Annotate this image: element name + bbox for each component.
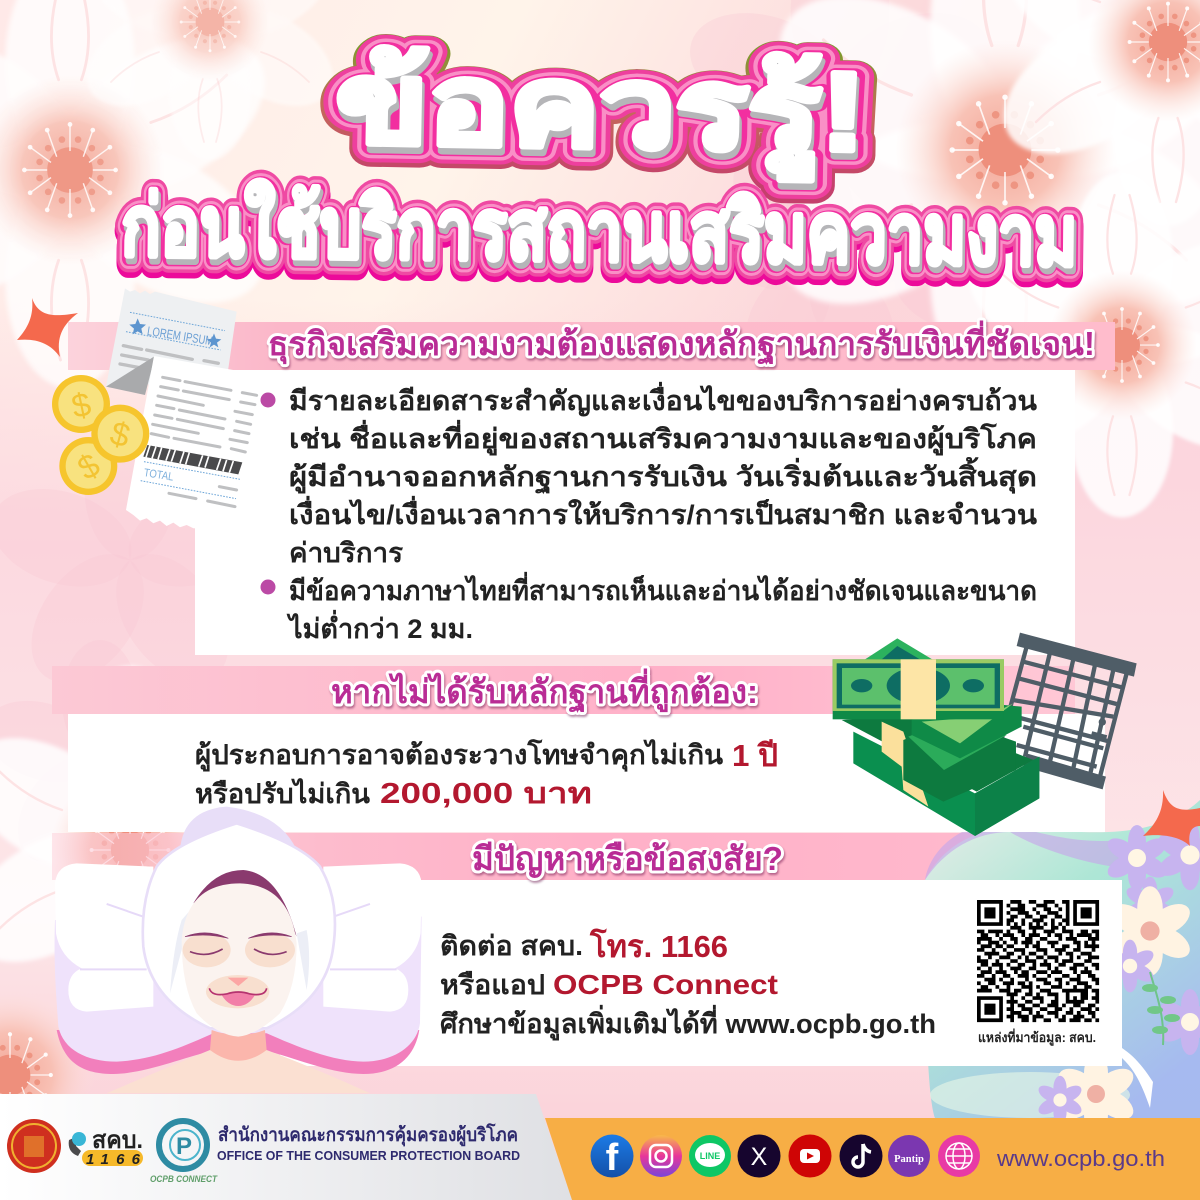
icon: pantip: Pantip [894, 1154, 924, 1165]
bullet one text [289, 381, 1038, 568]
icon: line [689, 1135, 731, 1177]
contact text: โทร. 1166 [589, 928, 728, 964]
icon: star left [17, 298, 78, 357]
icon: facebook [590, 1134, 634, 1179]
penalty text: ผู้ประกอบการอาจต้องระวางโทษจำคุกไม่เกิน [195, 738, 724, 772]
bullet two [260, 580, 276, 594]
hotline 1166 logo: 1166 [86, 1151, 141, 1168]
penalty text: 200,000 บาท [380, 778, 592, 810]
bullet one text: เช่น ชื่อและที่อยู่ของสถานเสริมความงามและของผู้บริโภค [289, 419, 1037, 456]
top bill [833, 638, 1004, 719]
bullet one text: มีรายละเอียดสาระสำคัญและเงื่อนไขของบริการอย่างครบถ้วน [289, 381, 1038, 417]
panel: receipt rules content [260, 320, 1095, 644]
panel: contact [280, 840, 1122, 1066]
band: contact heading [52, 833, 1124, 880]
coins: $ [72, 447, 106, 488]
hotline 1166 logo [69, 1127, 143, 1168]
back receipt [106, 288, 237, 387]
footer: logo panel [0, 1094, 572, 1200]
agency name: OFFICE OF THE CONSUMER PROTECTION BOARD [217, 1148, 520, 1163]
icon: jail bars [998, 633, 1137, 789]
penalty text: 1 ปี [732, 738, 778, 773]
hotline 1166 logo: สคบ. [92, 1127, 143, 1154]
icon: money stacks [833, 638, 1039, 836]
contact text [440, 928, 936, 1041]
QR source caption: แหล่งที่มาข้อมูล: สคบ. [978, 1028, 1096, 1046]
front receipt [106, 356, 290, 530]
bullet one text: ผู้มีอำนาจออกหลักฐานการรับเงิน วันเริ่มต้นและวันสิ้นสุด [289, 456, 1037, 495]
heading: questions: มีปัญหาหรือข้อสงสัย? [472, 840, 783, 878]
agency name [217, 1123, 520, 1163]
bullet two text: ไม่ต่ำกว่า 2 มม. [286, 609, 473, 644]
icon: facebook: f [606, 1137, 619, 1179]
OCPB connect logo: OCPB CONNECT [150, 1174, 218, 1184]
icon: website [938, 1135, 980, 1177]
bullet one text: ค่าบริการ [289, 538, 404, 568]
floral corner at lower right [925, 800, 1200, 1136]
heading band [52, 666, 1075, 714]
panel: receipt rules background [195, 370, 1075, 655]
coins [52, 375, 149, 495]
coins: $ [69, 386, 94, 426]
icon: tiktok [840, 1134, 882, 1178]
title line 1: ข้อควรรู้! [337, 43, 869, 185]
contact text: ศึกษาข้อมูลเพิ่มเติมได้ที่ www.ocpb.go.th [440, 1004, 936, 1041]
face with mask [182, 870, 297, 1037]
icon: X [738, 1134, 780, 1178]
footer: social band [545, 1118, 1200, 1200]
bullet one [260, 392, 276, 408]
title line 1: ข้อควรรู้! [335, 40, 867, 182]
panel: penalty [52, 666, 1105, 832]
OCPB connect logo [150, 1121, 218, 1184]
woman with facial mask [55, 807, 422, 1093]
bullet two text [286, 571, 1037, 644]
website url: www.ocpb.go.th [996, 1146, 1165, 1171]
QR code [977, 902, 1099, 1020]
middle bills [903, 700, 1022, 802]
coins: $ [106, 415, 134, 455]
government seal [7, 1119, 61, 1173]
heading: if no valid receipt: หากไม่ได้รับหลักฐานที่ถูกต้อง: [331, 668, 758, 713]
white content panel [280, 880, 1122, 1066]
title line 1: ข้อควรรู้! [336, 45, 869, 187]
agency name: สำนักงานคณะกรรมการคุ้มครองผู้บริโภค [218, 1123, 518, 1147]
chest and neck [107, 1030, 370, 1093]
towel [143, 807, 335, 1028]
contact text: OCPB Connect [553, 969, 778, 1000]
icon: youtube [788, 1134, 832, 1178]
heading: receipts must be clear: ธุรกิจเสริมความงามต้องแสดงหลักฐานการรับเงินที่ชัดเจน! [268, 320, 1095, 365]
back receipt: LOREM IPSUM [146, 324, 214, 348]
front receipt: TOTAL [143, 467, 174, 484]
icon: X: X [751, 1143, 768, 1171]
icon: star right [1143, 790, 1200, 846]
contact text: ติดต่อ สคบ. [440, 931, 583, 961]
title [121, 40, 1080, 291]
penalty text [195, 738, 778, 810]
title line 1: ข้อควรรู้! [336, 46, 869, 188]
icon: receipts and coins [52, 288, 290, 530]
title line 1: ข้อควรรู้! [337, 43, 869, 185]
pillow [55, 863, 422, 1074]
white content panel [68, 714, 1105, 832]
penalty text: หรือปรับไม่เกิน [195, 778, 371, 809]
contact text: หรือแอป [440, 970, 545, 1000]
title line 1: ข้อควรรู้! [337, 43, 869, 185]
icon: line: LINE [700, 1151, 720, 1161]
OCPB connect logo: P [176, 1133, 192, 1160]
lower stack [842, 713, 1039, 836]
bullet two text: มีข้อความภาษาไทยที่สามารถเห็นและอ่านได้อย่างชัดเจนและขนาด [289, 571, 1037, 606]
bullet one text: เงื่อนไข/เงื่อนเวลาการให้บริการ/การเป็นสมาชิก และจำนวน [289, 495, 1038, 530]
icon: instagram [640, 1135, 682, 1177]
icon: pantip [888, 1135, 930, 1177]
band: receipt heading [68, 322, 1115, 370]
